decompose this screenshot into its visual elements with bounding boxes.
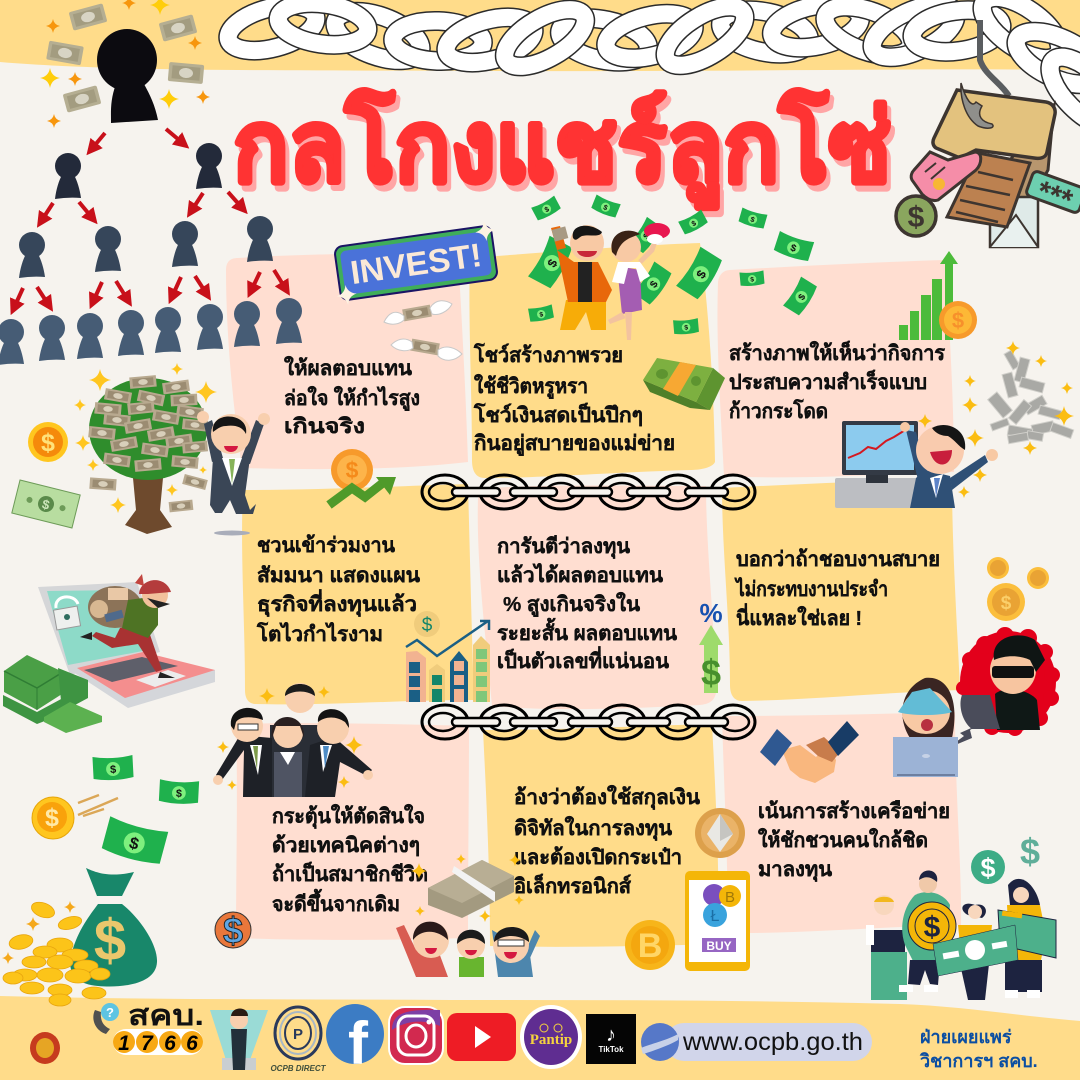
hotline logo <box>93 1000 204 1055</box>
OCPB direct logo: OCPB DIRECT <box>270 1064 327 1073</box>
sack <box>88 586 142 628</box>
text: step 9: เน้นการสร้างเครือข่าย <box>758 800 950 823</box>
icon: handshake <box>760 721 859 783</box>
tiktok: TikTok <box>598 1045 624 1054</box>
icon: pyramid scheme people network <box>0 0 302 365</box>
hotline logo: 7 <box>141 1032 154 1055</box>
text: step 2: ใช้ชีวิตหรูหรา <box>474 374 588 400</box>
panel: step 3 pink <box>717 260 954 477</box>
facebook: f <box>348 1010 369 1077</box>
lightning bolt <box>948 725 978 748</box>
icon: growth arrow with percent: $ <box>701 652 721 693</box>
text: step 2: โชว์เงินสดเป็นปึกๆ <box>473 401 643 427</box>
icon: upper right gold coins: $ <box>1001 593 1012 614</box>
panel: step 6 yellow <box>722 480 960 701</box>
icon: orange coin <box>28 422 68 462</box>
text: step 7: จะดีขึ้นจากเดิม <box>272 888 400 916</box>
facebook <box>326 1004 384 1077</box>
padlock <box>53 597 81 630</box>
text: step 1 <box>284 356 420 438</box>
pink credit card <box>911 152 981 201</box>
emblem <box>30 1032 60 1064</box>
text: step 7 <box>272 804 428 916</box>
title: กลโกงแชร์ลูกโซ่ <box>237 94 895 215</box>
icon: bitcoin coin: B <box>638 927 662 965</box>
icon: three cheering people <box>396 922 540 977</box>
panel: step 8 yellow <box>483 724 719 947</box>
panel: step 2 yellow <box>469 243 715 478</box>
icon: crypto phone: Ł <box>711 908 720 925</box>
icon: city growth chart <box>406 611 490 702</box>
panel: step 9 pink <box>722 712 961 933</box>
icon: growth arrow with percent <box>699 598 723 693</box>
icon: flying gold coin: $ <box>45 804 59 832</box>
text: step 6: บอกว่าถ้าชอบงานสบาย <box>736 548 940 571</box>
icon: people holding giant money <box>866 870 1056 1000</box>
publisher credit: ฝ่ายเผยแพร่ <box>920 1027 1012 1047</box>
bottom yellow band <box>0 996 1080 1080</box>
text: step 8 <box>514 785 700 898</box>
icon: money bag with gold coins: $ <box>94 908 126 973</box>
envelope <box>990 197 1038 247</box>
tiktok <box>586 1014 636 1064</box>
password tag: *** <box>1032 175 1077 218</box>
icon: invest badge: INVEST! <box>348 236 484 291</box>
text: step 3: ก้าวกระโดด <box>729 398 828 423</box>
hotline logo: 6 <box>164 1032 176 1055</box>
fishing hook line <box>980 20 1009 96</box>
icon: thief running out of laptop <box>38 574 215 708</box>
tiktok: ♪ <box>606 1024 616 1046</box>
man with coin <box>899 870 956 992</box>
icon: stack of cash with orange band <box>643 358 725 410</box>
text: step 5 <box>497 535 677 673</box>
hotline logo: สคบ. <box>128 1000 204 1032</box>
hacker laptop <box>960 695 1000 729</box>
text: step 6: ไม่กระทบงานประจำ <box>734 577 888 601</box>
text: step 5: การันตีว่าลงทุน <box>497 535 630 559</box>
OCPB direct logo <box>270 1007 327 1073</box>
instagram <box>389 1007 443 1064</box>
red blob <box>956 627 1060 736</box>
woman with hijab and card <box>998 879 1056 998</box>
text: step 5: แล้วได้ผลตอบแทน <box>497 563 663 587</box>
back of folder <box>1010 105 1054 220</box>
icon: rising bar chart with coin <box>899 251 977 340</box>
icon: green dollar circle <box>971 850 1005 884</box>
text: step 8: อ้างว่าต้องใช้สกุลเงิน <box>514 785 700 810</box>
icon: fish hook with stolen data folder <box>896 20 1080 247</box>
text: step 8: และต้องเปิดกระเป๋า <box>514 846 682 869</box>
icon: flying winged money <box>384 301 462 360</box>
icon: green coin and arrow <box>329 449 396 505</box>
icon: orange blue dollar coin: $ <box>223 910 243 951</box>
top chain decoration <box>223 0 1080 138</box>
text: step 3: ประสบความสำเร็จแบบ <box>729 368 927 394</box>
dollar coin <box>896 196 936 236</box>
text: step 8: อิเล็กทรอนิกส์ <box>514 872 631 898</box>
text: step 9: ให้ชักชวนคนใกล้ชิด <box>758 828 928 852</box>
folder front <box>933 90 1055 158</box>
hotline logo: 6 <box>186 1032 198 1055</box>
second level people <box>55 143 222 199</box>
footer logos <box>30 1000 1038 1077</box>
text: step 9: มาลงทุน <box>758 858 832 882</box>
money and sparkles around boss <box>40 0 210 128</box>
top yellow band <box>0 0 1080 71</box>
icon: flying green bills <box>528 195 818 335</box>
text: step 2: กินอยู่สบายของแม่ข่าย <box>474 432 675 457</box>
icon: crypto phone: BUY <box>706 939 732 953</box>
icon: man cheering at stock monitor <box>835 414 998 508</box>
woman with bill <box>933 904 1018 1000</box>
text: step 7: ด้วยเทคนิคต่างๆ <box>272 834 420 857</box>
website: www.ocpb.go.th <box>682 1028 863 1056</box>
text: step 8: ดิจิทัลในการลงทุน <box>514 816 672 841</box>
thief torso and head <box>122 596 158 638</box>
panel: step 4 yellow <box>242 484 474 704</box>
panel: step 5 pink <box>478 486 716 709</box>
text: step 6: นี่แหละใช่เลย ! <box>736 603 862 630</box>
icon: falling green bills <box>92 755 199 867</box>
boss silhouette <box>97 29 158 123</box>
text: step 2: โชว์สร้างภาพรวย <box>473 342 623 367</box>
icon: crypto phone: B <box>725 889 735 906</box>
title: กลโกงแชร์ลูกโซ่ <box>233 88 891 209</box>
fourth level people <box>0 298 302 365</box>
red arrows <box>13 129 287 310</box>
icon: jumping businessman <box>197 411 270 536</box>
icon: rising bar chart with coin: $ <box>952 308 964 333</box>
hook <box>961 83 993 128</box>
icon: rich couple throwing money <box>551 223 670 340</box>
icon: city growth chart: $ <box>422 615 433 636</box>
publisher credit <box>919 1027 1038 1071</box>
woman in purple dress <box>608 223 670 340</box>
text: step 1: เกินจริง <box>284 415 365 438</box>
gold coin pile <box>3 899 110 1006</box>
icon: chain between rows 2 and 3 <box>422 705 755 739</box>
pantip <box>520 1005 582 1069</box>
OCPB direct logo: P <box>293 1026 303 1043</box>
icon: green coin and arrow: $ <box>346 457 359 483</box>
text: step 4: ธุรกิจที่ลงทุนแล้ว <box>257 589 417 617</box>
text: step 3: สร้างภาพให้เห็นว่ากิจการ <box>729 339 945 365</box>
icon: light green dollar bill <box>12 480 80 528</box>
text: step 9 <box>758 800 950 882</box>
publisher credit: วิชาการฯ สคบ. <box>919 1051 1038 1071</box>
text: step 7: ถ้าเป็นสมาชิกชีวิต <box>272 860 428 886</box>
panel: step 1 pink <box>226 254 468 469</box>
icon: orange blue dollar coin <box>215 910 251 951</box>
icon: green dollar circle: $ <box>980 853 996 883</box>
icon: invest badge <box>329 220 503 306</box>
text: step 4 <box>256 534 420 646</box>
text: step 5: ระยะสั้น ผลตอบแทน <box>497 617 677 645</box>
text: step 5: % สูงเกินจริงใน <box>503 592 640 618</box>
text: step 5: เป็นตัวเลขที่แน่นอน <box>497 646 669 673</box>
icon: hacker scamming a woman <box>893 627 1060 777</box>
man with coin: $ <box>924 911 941 944</box>
hotline logo: 1 <box>118 1032 130 1055</box>
icon: orange coin: $ <box>41 429 55 457</box>
icon: light green dollar bill: $ <box>41 496 52 513</box>
hacker <box>990 635 1045 730</box>
avatar mascot <box>210 1008 268 1070</box>
woman laptop <box>893 737 958 777</box>
icon: business group <box>213 683 373 797</box>
text: step 4: โตไวกำไรงาม <box>256 621 383 646</box>
document <box>947 153 1030 227</box>
icon: growth arrow with percent: % <box>699 598 723 628</box>
text: step 2 <box>473 342 675 457</box>
laptop <box>38 582 215 708</box>
third level people <box>19 216 273 278</box>
icon: ethereum coin <box>695 808 745 858</box>
text: step 4: ชวนเข้าร่วมงาน <box>257 534 395 557</box>
youtube <box>447 1013 516 1061</box>
hotline logo: ? <box>106 1005 114 1020</box>
man in orange jacket <box>551 225 612 330</box>
icon: chain between rows 1 and 2 <box>422 475 755 509</box>
icon: money tree <box>74 363 217 534</box>
dollar coin: $ <box>908 201 925 234</box>
icon: flying gold coin <box>32 795 118 839</box>
icon: crypto phone <box>685 871 750 971</box>
website <box>641 1023 872 1061</box>
icon: yen cash stack <box>411 854 524 922</box>
pantip: Pantip <box>530 1032 572 1048</box>
icon: green dollar sign: $ <box>1020 831 1040 872</box>
icon: scattered grey cash burst <box>962 341 1074 455</box>
text: step 7: กระตุ้นให้ตัดสินใจ <box>272 804 425 829</box>
icon: green cash bundles <box>3 655 102 733</box>
icon: bitcoin coin <box>625 920 675 970</box>
woman <box>898 678 954 742</box>
text: step 1: ให้ผลตอบแทน <box>284 356 412 380</box>
icon: money bag with gold coins <box>2 868 157 1006</box>
icon: upper right gold coins <box>987 557 1049 621</box>
text: step 3 <box>729 339 945 423</box>
thief legs <box>92 620 162 672</box>
password tag <box>1023 170 1080 221</box>
text: step 4: สัมมนา แสดงแผน <box>257 564 420 587</box>
text: step 1: ล่อใจ ให้กำไรสูง <box>284 386 420 412</box>
text: step 6 <box>734 548 940 630</box>
panel: step 7 pink <box>236 723 469 940</box>
person with phone <box>866 895 907 1000</box>
